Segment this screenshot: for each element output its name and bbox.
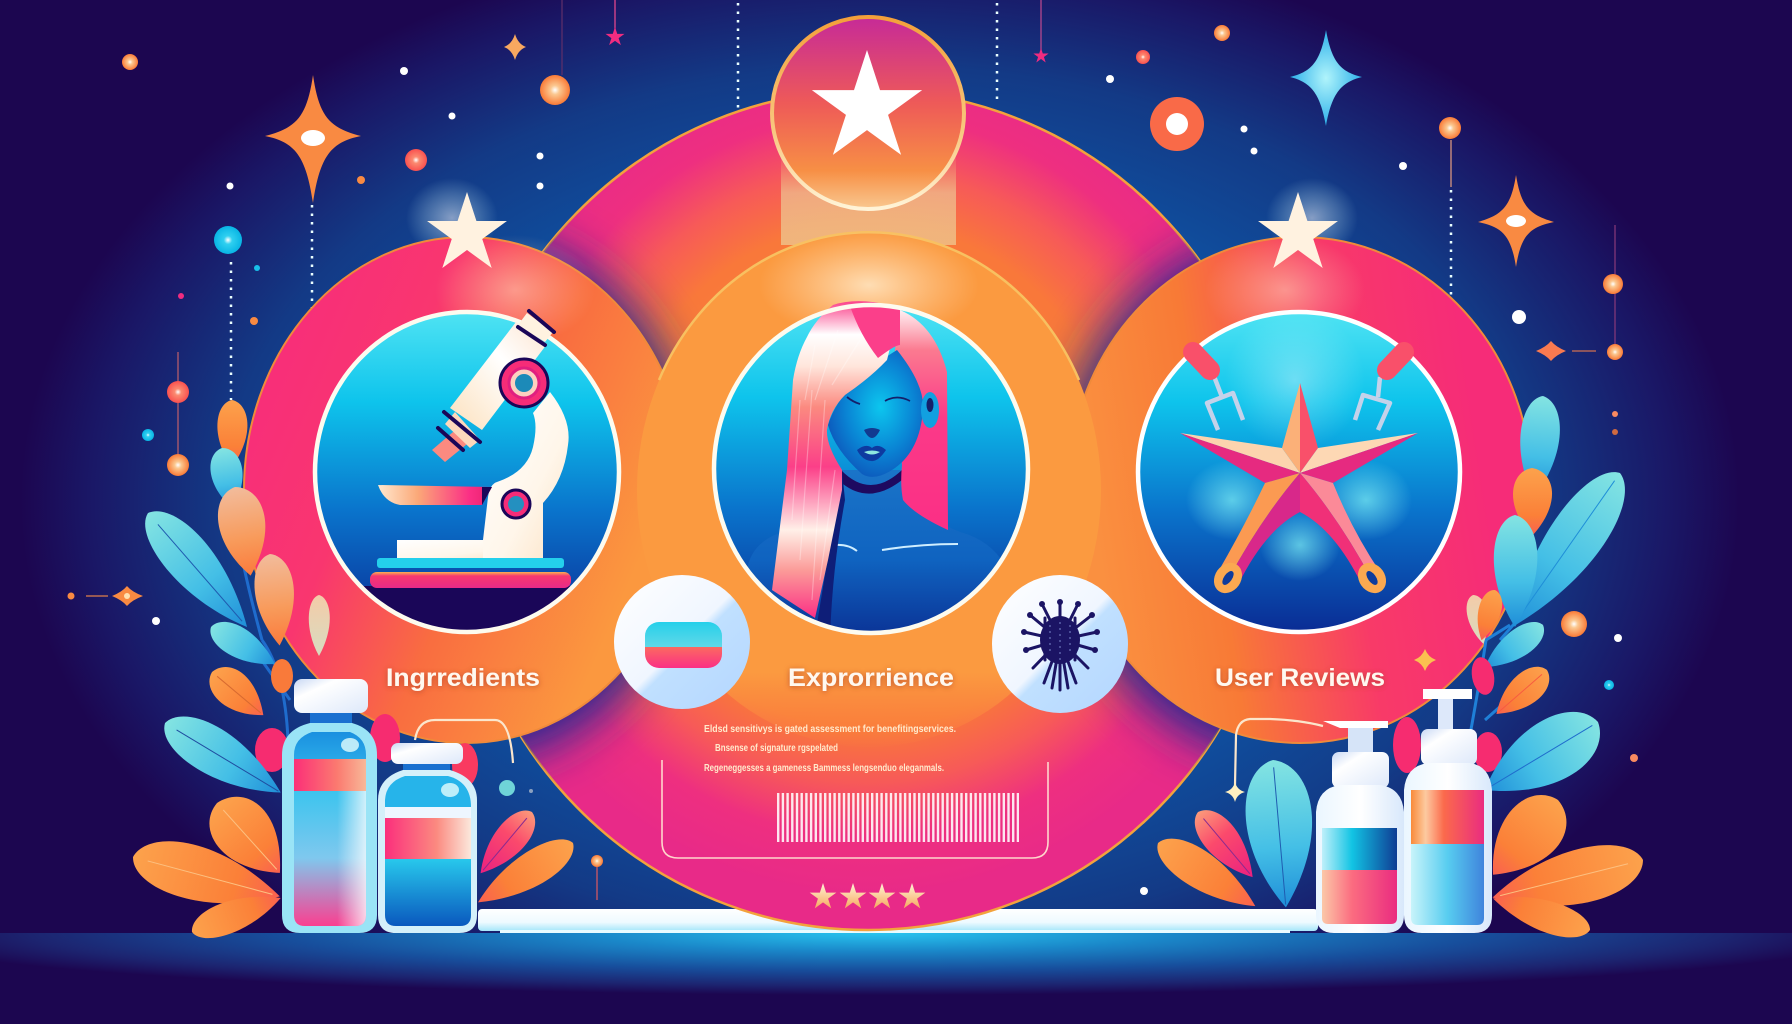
foliage: left cluster (126, 400, 582, 946)
facial features (847, 397, 910, 404)
icon: cyan sparkle (1290, 30, 1362, 126)
panel: ingredients (244, 178, 688, 743)
bottle: pump A (1316, 721, 1404, 933)
panel: top medallion with star (772, 17, 964, 209)
hook line left (415, 720, 513, 763)
panel: user reviews (1068, 178, 1532, 743)
face (828, 350, 923, 477)
rating stars (810, 883, 925, 908)
display shelf (478, 909, 1318, 933)
microscope base (370, 572, 571, 588)
panel: review box with barcode (662, 760, 1048, 858)
icon: orange sparkle left (265, 75, 361, 203)
badge: capsule (614, 575, 750, 709)
hair front (772, 301, 900, 618)
floor band (0, 933, 1792, 1024)
barcode (777, 793, 1019, 842)
microscope knobs (500, 359, 548, 407)
text block: description: Regeneggesses a gameness Bammess lengsenduo eleganmals. (704, 762, 944, 774)
background decorations: left (68, 54, 456, 625)
heading: Experience: Exprorrience (788, 664, 954, 692)
microscope arm (483, 392, 569, 558)
badge: hair brush (992, 575, 1128, 713)
sparkle: gold small (1414, 649, 1436, 671)
background decorations: top (504, 0, 1258, 190)
panel: large background circle (520, 100, 1221, 932)
background decorations: right (499, 30, 1638, 900)
text block: description (704, 723, 956, 774)
ear (921, 392, 939, 428)
hair back (895, 310, 948, 530)
bottle: pump B (1404, 689, 1492, 933)
star: user reviews (1258, 192, 1338, 268)
star: ingredients (427, 192, 507, 268)
heading: Ingredients: Ingrredients (386, 664, 540, 692)
microscope stage (378, 485, 492, 505)
bottle: tall vial (282, 679, 377, 933)
body (748, 470, 1000, 630)
icon: microscope disc (312, 308, 622, 634)
text block: description: Eldsd sensitivys is gated assessment for benefitingservices. (704, 723, 956, 735)
microscope tube (450, 322, 547, 430)
text block: description: Bnsense of signature rgspelated (715, 742, 838, 754)
faceted star (1180, 383, 1418, 585)
halo behind star (406, 178, 498, 258)
foliage: right cluster (1148, 394, 1650, 945)
hook line right with sparkle (1225, 719, 1323, 802)
bottle: short vial (378, 743, 477, 933)
icon: woman portrait disc (714, 301, 1028, 650)
heading: User Reviews: User Reviews (1215, 664, 1385, 692)
spoon ends (1208, 557, 1248, 599)
icon: top star (812, 50, 922, 155)
icon: star tool disc (1138, 310, 1460, 632)
panel: experience (637, 230, 1101, 747)
dark strand (818, 470, 845, 625)
icon: orange sparkle right (1478, 175, 1554, 267)
forks (1207, 371, 1390, 430)
